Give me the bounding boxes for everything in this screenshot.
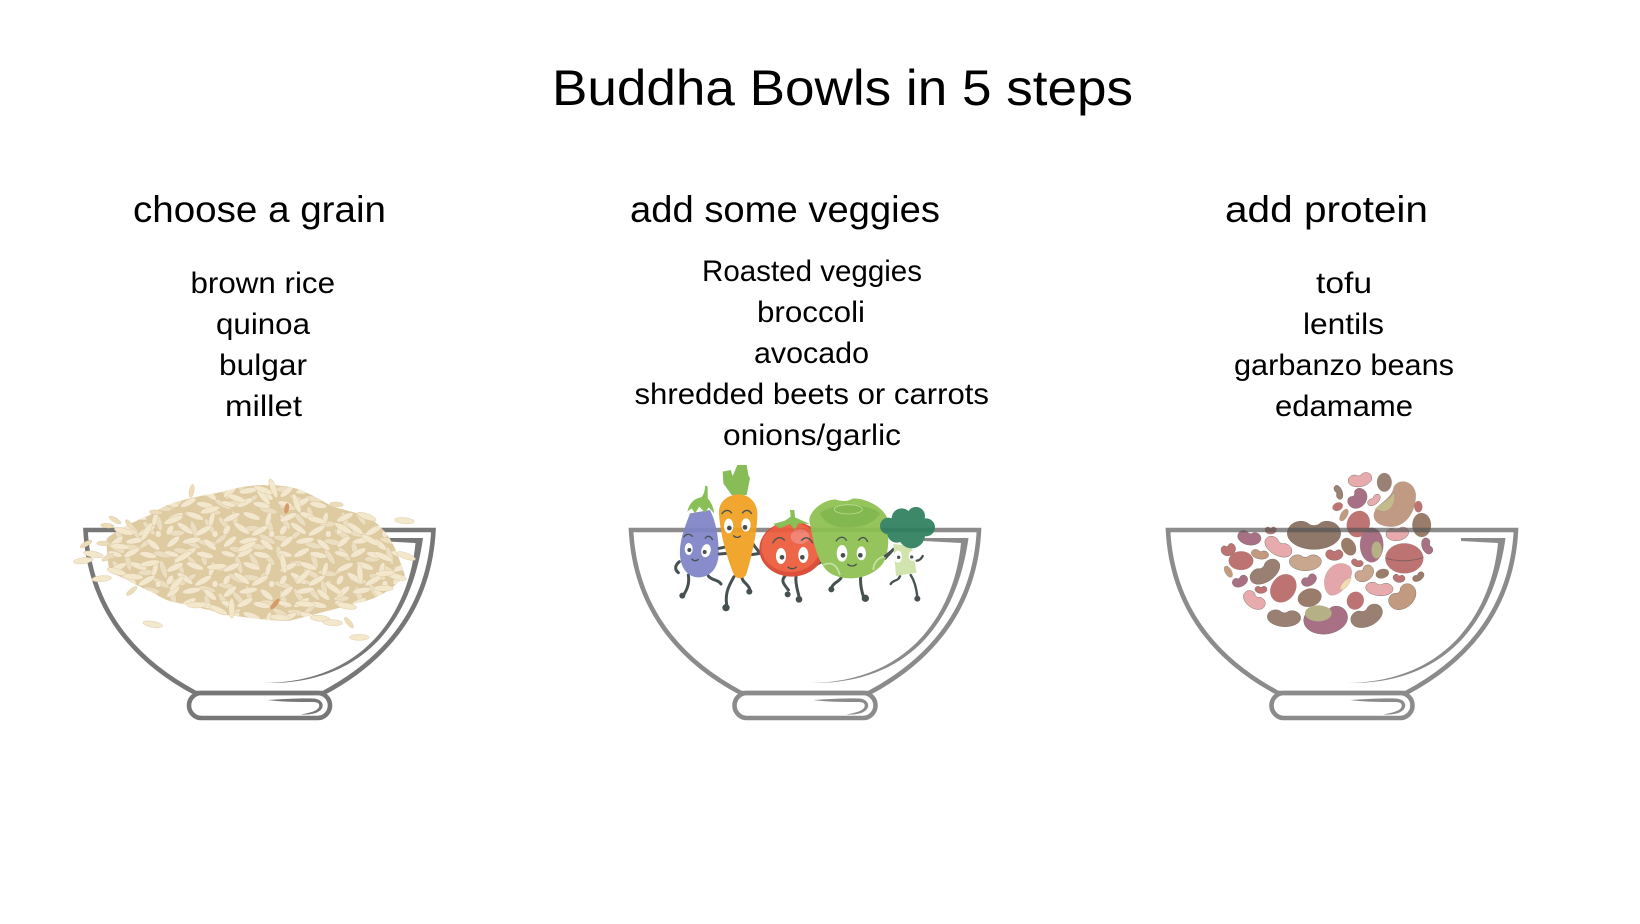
broccoli character [880,507,935,602]
eggplant character [676,486,721,599]
cabbage character [809,498,893,602]
list: grains: millet [225,390,303,423]
icon: bowl outline 3 [1168,530,1516,718]
heading: choose a grain: choose a grain [133,189,386,230]
title: Buddha Bowls in 5 steps [552,60,1133,116]
list: veggies: shredded beets or carrots [634,378,989,411]
list: veggies: broccoli [757,296,865,329]
column 2: add some veggies [630,189,989,718]
icon: bowl outline 2 [631,530,979,718]
list: veggies: avocado [754,337,869,370]
icon: bowl outline 1 [86,530,434,718]
list: grains [190,267,335,423]
column 1: choose a grain [73,189,433,718]
list: grains: brown rice [190,267,335,300]
list: veggies [634,255,989,452]
list: grains: bulgar [219,349,307,382]
illustration: cartoon vegetables [676,465,935,611]
heading: add some veggies: add some veggies [630,189,940,230]
carrot character [719,465,760,611]
list: proteins: edamame [1275,390,1413,423]
list: proteins: tofu [1316,267,1372,300]
heading: add protein: add protein [1225,189,1428,230]
illustration: brown rice pile [73,478,416,640]
illustration: mixed beans [1220,471,1434,637]
column 3: add protein [1168,189,1516,718]
list: veggies: Roasted veggies [702,255,922,288]
list: proteins: garbanzo beans [1234,349,1454,382]
list: proteins [1234,267,1454,423]
list: proteins: lentils [1303,308,1384,341]
list: veggies: onions/garlic [723,419,901,452]
tomato character [759,510,825,603]
list: grains: quinoa [216,308,310,341]
